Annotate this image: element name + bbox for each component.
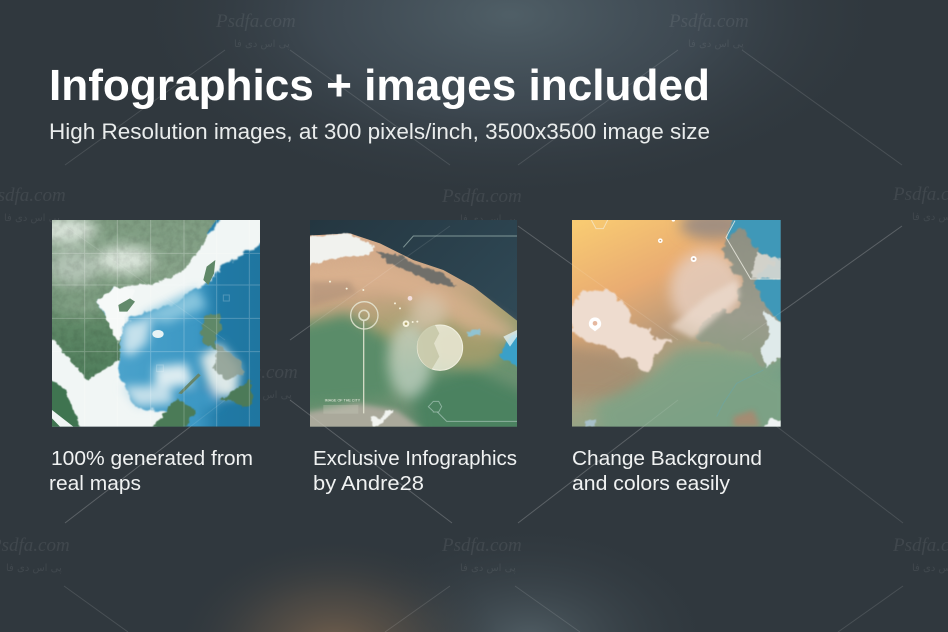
green lowland right: [408, 368, 517, 427]
grid: [52, 220, 260, 427]
mountain range: [377, 252, 457, 287]
snow: [303, 234, 375, 267]
grey land right: [693, 228, 787, 367]
Taiwan: [203, 260, 215, 285]
sea: [498, 333, 517, 368]
title: Infographics + images included: [49, 61, 710, 110]
Malaysia: [52, 380, 80, 427]
haze upper: [410, 295, 447, 332]
watermarks: پی اس دی فا: [688, 39, 744, 50]
watermarks: پی اس دی فا: [234, 39, 290, 50]
bottom ice: [760, 418, 783, 430]
watermarks: پی اس دی فا: [460, 563, 516, 574]
hud label: [323, 399, 361, 414]
caption: change background: Change Background: [572, 448, 762, 470]
Mindanao: [220, 380, 253, 408]
globe land: [310, 233, 517, 427]
Luzon: [200, 314, 222, 352]
land relief: [52, 220, 214, 377]
watermarks: پی اس دی فا: [460, 214, 516, 225]
panel: real maps image: [52, 220, 260, 427]
hud label: IMAGE OF THE CITY: [325, 399, 361, 403]
caption: exclusive infographics: by Andre28: [313, 473, 424, 495]
rocky west: [310, 282, 357, 307]
caption: exclusive infographics: Exclusive Infographics: [313, 448, 517, 470]
map pins: [589, 218, 697, 331]
pale shallows: [122, 288, 240, 407]
watermarks: پی اس دی فا: [236, 390, 292, 401]
watermarks: Psdfa.com: [215, 11, 296, 32]
watermarks: Psdfa.com: [441, 186, 522, 207]
hud pins: [329, 281, 418, 327]
caption: real maps: [49, 448, 253, 495]
hud large disc: [417, 325, 463, 370]
hexagon outline: [726, 221, 781, 279]
Hainan: [118, 298, 135, 312]
watermarks: Psdfa.com: [668, 11, 749, 32]
caption: exclusive infographics: [313, 448, 517, 495]
red patch: [733, 410, 760, 427]
caption: change background: and colors easily: [572, 473, 730, 495]
river: [370, 410, 393, 427]
caption: change background: [572, 448, 762, 495]
watermarks: Psdfa.com: [670, 362, 751, 383]
right coast ice: [760, 310, 787, 367]
watermarks: پی اس دی فا: [6, 563, 62, 574]
watermarks: Psdfa.com: [441, 535, 522, 556]
haze lower: [388, 322, 432, 398]
shelf white: [52, 220, 260, 427]
panel: editable colours image: [572, 220, 781, 427]
sea: [727, 213, 790, 330]
river: [717, 370, 763, 417]
caption: real maps: real maps: [49, 473, 141, 495]
Palawan: [178, 373, 201, 394]
hud hexagon lines: [403, 236, 517, 421]
olive centre: [430, 332, 503, 368]
Borneo: [152, 398, 196, 427]
pale glow: [670, 250, 743, 330]
land highlights: [52, 220, 160, 320]
subtitle: High Resolution images, at 300 pixels/inch, 3500x3500 image size: [49, 119, 710, 144]
Visayas: [213, 343, 243, 380]
green lowland left: [310, 306, 396, 405]
peach highlands: [300, 260, 517, 340]
bottom grey terrain: [310, 400, 424, 427]
white cloud: [570, 290, 672, 373]
watermarks: پی اس دی فا: [690, 390, 746, 401]
land mainland: [52, 220, 217, 381]
green lowland: [593, 350, 793, 443]
panel: earth globe image: [310, 220, 517, 427]
caption: real maps: 100% generated from: [51, 448, 253, 470]
watermarks: پی اس دی فا: [4, 213, 60, 224]
lower brown: [572, 342, 643, 399]
gulf of Tonkin: [96, 286, 126, 344]
top right shading: [674, 220, 733, 247]
hud target circle: [351, 302, 378, 413]
watermarks: Psdfa.com: [217, 362, 298, 383]
watermark lines over images: [65, 226, 902, 523]
